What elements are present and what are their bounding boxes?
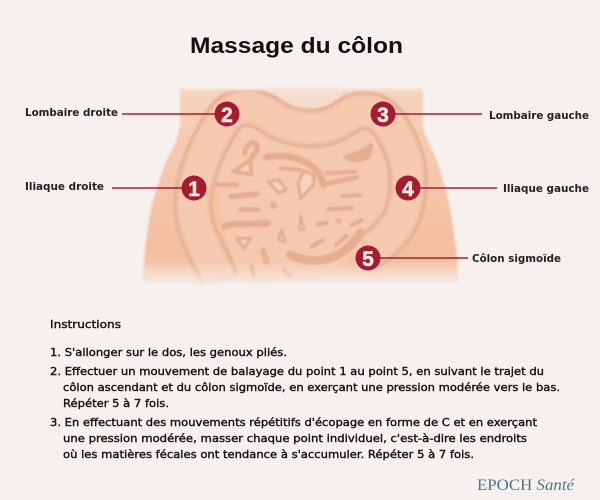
callout: Lombaire droite: Lombaire droite — [25, 107, 118, 119]
illustration: abdomen with colon — [130, 84, 470, 302]
small intestine folds (drawn at 3x scale) — [217, 143, 371, 277]
callout: Côlon sigmoïde: 5 — [362, 248, 374, 271]
instructions heading: Instructions — [50, 318, 121, 331]
colon band outline — [193, 107, 408, 280]
step 2: côlon ascendant et du côlon sigmoïde, en exerçant une pression modérée vers le bas. — [63, 381, 560, 394]
abdominal cavity — [218, 125, 392, 282]
title: Massage du côlon — [190, 33, 403, 58]
callout: Lombaire droite — [25, 102, 240, 127]
torso silhouette — [143, 88, 458, 283]
callout: Lombaire gauche — [370, 102, 589, 127]
callout: Iliaque droite: 1 — [188, 178, 200, 201]
step 2: Répéter 5 à 7 fois. — [63, 397, 169, 410]
logo: EPOCH Santé: EPOCH Santé — [477, 477, 575, 494]
callout: Lombaire gauche: Lombaire gauche — [489, 110, 589, 122]
callout: Lombaire droite: 2 — [221, 104, 233, 127]
callout: Iliaque gauche: Iliaque gauche — [503, 183, 589, 195]
callout: Iliaque droite — [25, 176, 206, 201]
step 3 — [50, 416, 538, 461]
callout: Iliaque gauche: 4 — [402, 178, 414, 201]
callout: Iliaque gauche — [396, 176, 589, 201]
step 3: une pression modérée, masser chaque point individuel, c'est-à-dire les endroits — [63, 432, 527, 445]
bottom fade — [130, 262, 470, 302]
callout: Iliaque droite: Iliaque droite — [25, 181, 104, 193]
callout: Côlon sigmoïde: Côlon sigmoïde — [472, 253, 561, 265]
callout: Côlon sigmoïde — [356, 246, 561, 271]
step 3: 3. En effectuant des mouvements répétitifs d'écopage en forme de C et en exerçant — [50, 416, 538, 429]
top fade — [170, 84, 435, 94]
pale stomach area above transverse colon — [262, 88, 345, 112]
step 1: 1. S'allonger sur le dos, les genoux pliés. — [50, 346, 287, 359]
step 3: où les matières fécales ont tendance à s'accumuler. Répéter 5 à 7 fois. — [63, 448, 474, 461]
colon band fill — [193, 107, 408, 280]
instructions text block — [50, 318, 560, 461]
callout: Lombaire gauche: 3 — [377, 104, 389, 127]
step 2 — [50, 365, 560, 410]
step 2: 2. Effectuer un mouvement de balayage du point 1 au point 5, en suivant le trajet du — [50, 365, 544, 378]
